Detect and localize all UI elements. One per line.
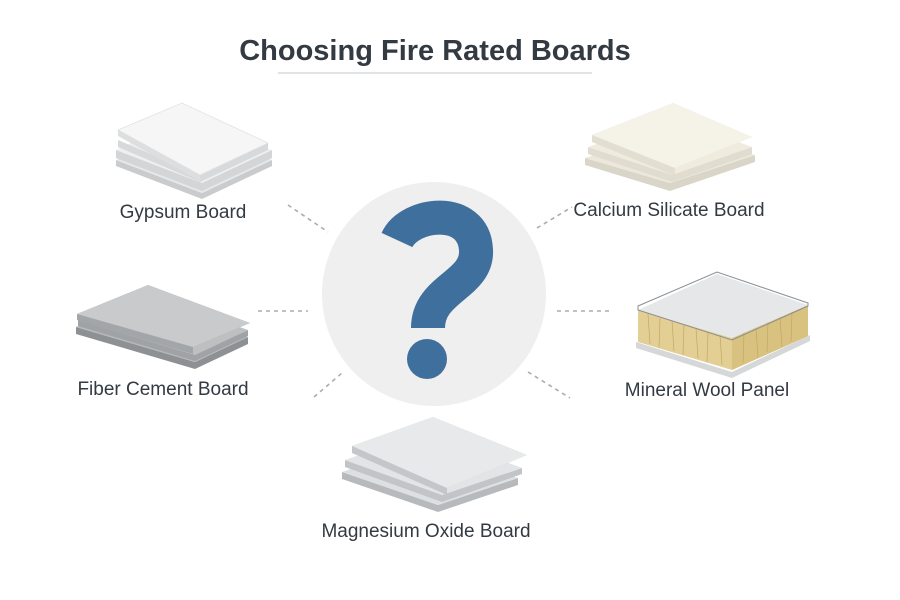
label: gypsum board: Gypsum Board bbox=[120, 202, 246, 223]
icon: question mark bbox=[397, 218, 476, 379]
board: magnesium oxide bbox=[342, 417, 527, 512]
board: mineral wool panel bbox=[636, 272, 810, 378]
label: calcium silicate board: Calcium Silicate Board bbox=[573, 200, 765, 221]
label: mineral wool panel: Mineral Wool Panel bbox=[625, 380, 789, 401]
board: gypsum bbox=[116, 103, 272, 199]
board: calcium silicate bbox=[585, 103, 755, 191]
connector lines bbox=[258, 205, 612, 398]
center circle with question mark bbox=[322, 182, 546, 406]
label: magnesium oxide board: Magnesium Oxide Board bbox=[321, 521, 531, 542]
board: fiber cement bbox=[76, 285, 250, 369]
label: fiber cement board: Fiber Cement Board bbox=[77, 379, 249, 400]
title: Choosing Fire Rated Boards bbox=[239, 35, 631, 67]
